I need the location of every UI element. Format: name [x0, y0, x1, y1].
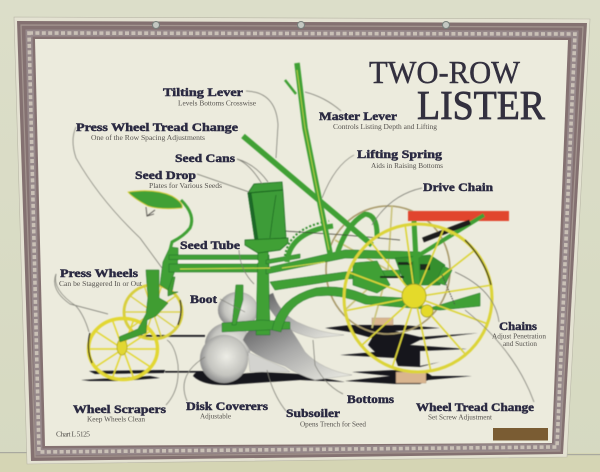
- title: two-row lister: LISTER: [417, 82, 546, 128]
- label: press wheel tread change: One of the Row Spacing Adjustments: [91, 133, 205, 142]
- tan ground blocks: [372, 318, 426, 383]
- label: seed drop: Seed Drop: [135, 170, 196, 182]
- press wheel, front: [87, 318, 159, 380]
- label: seed drop: [135, 170, 222, 190]
- plow disks: [200, 292, 258, 383]
- label: chains: Adjust Penetration: [492, 332, 546, 340]
- label: subsoiler: Opens Trench for Seed: [300, 420, 366, 428]
- master lever: [285, 63, 331, 258]
- label: wheel tread change: [416, 402, 534, 422]
- title: two-row lister: [369, 54, 546, 128]
- green frame and beams: [160, 247, 480, 335]
- label: press wheel tread change: [76, 122, 238, 142]
- sector gear: [284, 214, 400, 262]
- label: press wheels: Press Wheels: [60, 268, 139, 280]
- label: disk coverers: Disk Coverers: [186, 401, 269, 413]
- label: lifting spring: Aids in Raising Bottoms: [371, 161, 443, 170]
- title: two-row lister: TWO-ROW: [369, 54, 521, 90]
- label: press wheels: [59, 268, 143, 288]
- press wheel axle brackets: [119, 270, 178, 342]
- tilting lever: [243, 136, 372, 245]
- label: subsoiler: [286, 408, 366, 428]
- label: press wheel tread change: Press Wheel Tread Change: [76, 122, 238, 134]
- label: chains: and Suction: [503, 339, 537, 348]
- label: bottoms: Bottoms: [347, 394, 395, 406]
- label: wheel scrapers: Wheel Scrapers: [73, 404, 167, 416]
- label: seed drop: Plates for Various Seeds: [149, 181, 222, 190]
- label: press wheels: Can be Staggered In or Out: [59, 279, 143, 288]
- label: chains: Chains: [499, 321, 538, 333]
- label: wheel tread change: Set Screw Adjustment: [428, 412, 493, 422]
- chain: [442, 275, 455, 305]
- label: master lever: Master Lever: [319, 111, 397, 123]
- mounting eyelets: [152, 22, 450, 28]
- label: disk coverers: [186, 401, 269, 420]
- beam highlight slots: [178, 260, 258, 263]
- label: wheel tread change: Wheel Tread Change: [416, 402, 534, 414]
- label: tilting lever: [163, 87, 257, 108]
- gear detail near hub: [380, 262, 430, 278]
- leader lines: [55, 91, 534, 411]
- label: chains: [492, 321, 546, 348]
- chart number: Chart L 5125: [56, 430, 90, 438]
- upper right frame: [408, 215, 484, 300]
- label: tilting lever: Levels Bottoms Crosswise: [178, 98, 257, 108]
- label: master lever: [319, 111, 437, 131]
- press wheel, rear: [123, 285, 183, 339]
- label: seed tube: Seed Tube: [180, 240, 240, 252]
- label: drive chain: Drive Chain: [423, 182, 494, 194]
- label: master lever: Controls Listing Depth and Lifting: [333, 122, 437, 131]
- red foot platform: [408, 211, 509, 221]
- label: seed cans: Seed Cans: [175, 153, 236, 165]
- label: disk coverers: Adjustable: [200, 412, 232, 420]
- label: wheel scrapers: Keep Wheels Clean: [87, 414, 145, 424]
- label: lifting spring: [357, 149, 443, 170]
- rear wheel, back pair: [326, 206, 450, 334]
- label: subsoiler: Subsoiler: [286, 408, 340, 420]
- drive wheel: [344, 224, 492, 372]
- seat and spring stem: [128, 191, 192, 250]
- label: tilting lever: Tilting Lever: [163, 87, 243, 99]
- ground shadows: [81, 325, 478, 385]
- seed can: [245, 182, 288, 253]
- yellow beam pinstripes: [180, 262, 325, 269]
- label: lifting spring: Lifting Spring: [357, 149, 442, 161]
- label: boot: Boot: [190, 294, 217, 306]
- label: wheel scrapers: [73, 404, 167, 424]
- plow bottoms: [243, 293, 352, 380]
- brass maker plaque: [493, 428, 548, 440]
